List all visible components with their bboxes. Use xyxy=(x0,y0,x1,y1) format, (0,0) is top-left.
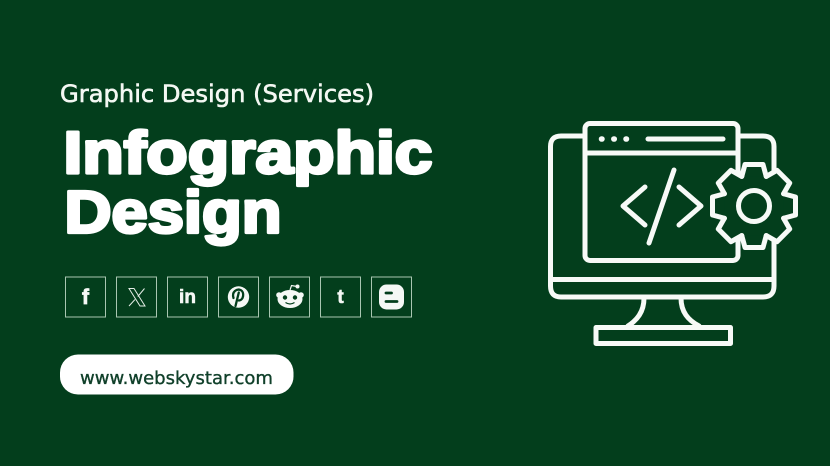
icon: linkedin: in xyxy=(179,287,196,308)
icon: monitor with code window and gear xyxy=(550,124,796,344)
website pill xyxy=(60,354,294,394)
monitor frame xyxy=(550,136,774,297)
title: Design xyxy=(64,180,282,246)
website pill: www.webskystar.com xyxy=(80,368,273,389)
icon: reddit xyxy=(270,277,310,317)
icon: tumblr: t xyxy=(337,287,344,308)
monitor stand xyxy=(596,298,730,344)
icon: tumblr xyxy=(320,277,360,317)
icon: X xyxy=(116,277,156,317)
code symbol xyxy=(623,170,701,243)
icon: blogger xyxy=(372,277,412,317)
icon: facebook xyxy=(66,277,106,317)
subtitle: Graphic Design (Services) xyxy=(60,80,374,108)
title: Infographic xyxy=(64,120,432,186)
icon: facebook: f xyxy=(82,286,90,309)
icon: pinterest xyxy=(218,277,258,317)
icon: linkedin xyxy=(168,277,208,317)
social icons row xyxy=(66,277,412,317)
code window xyxy=(585,124,738,260)
title xyxy=(64,120,432,246)
icon: gear xyxy=(712,164,796,248)
